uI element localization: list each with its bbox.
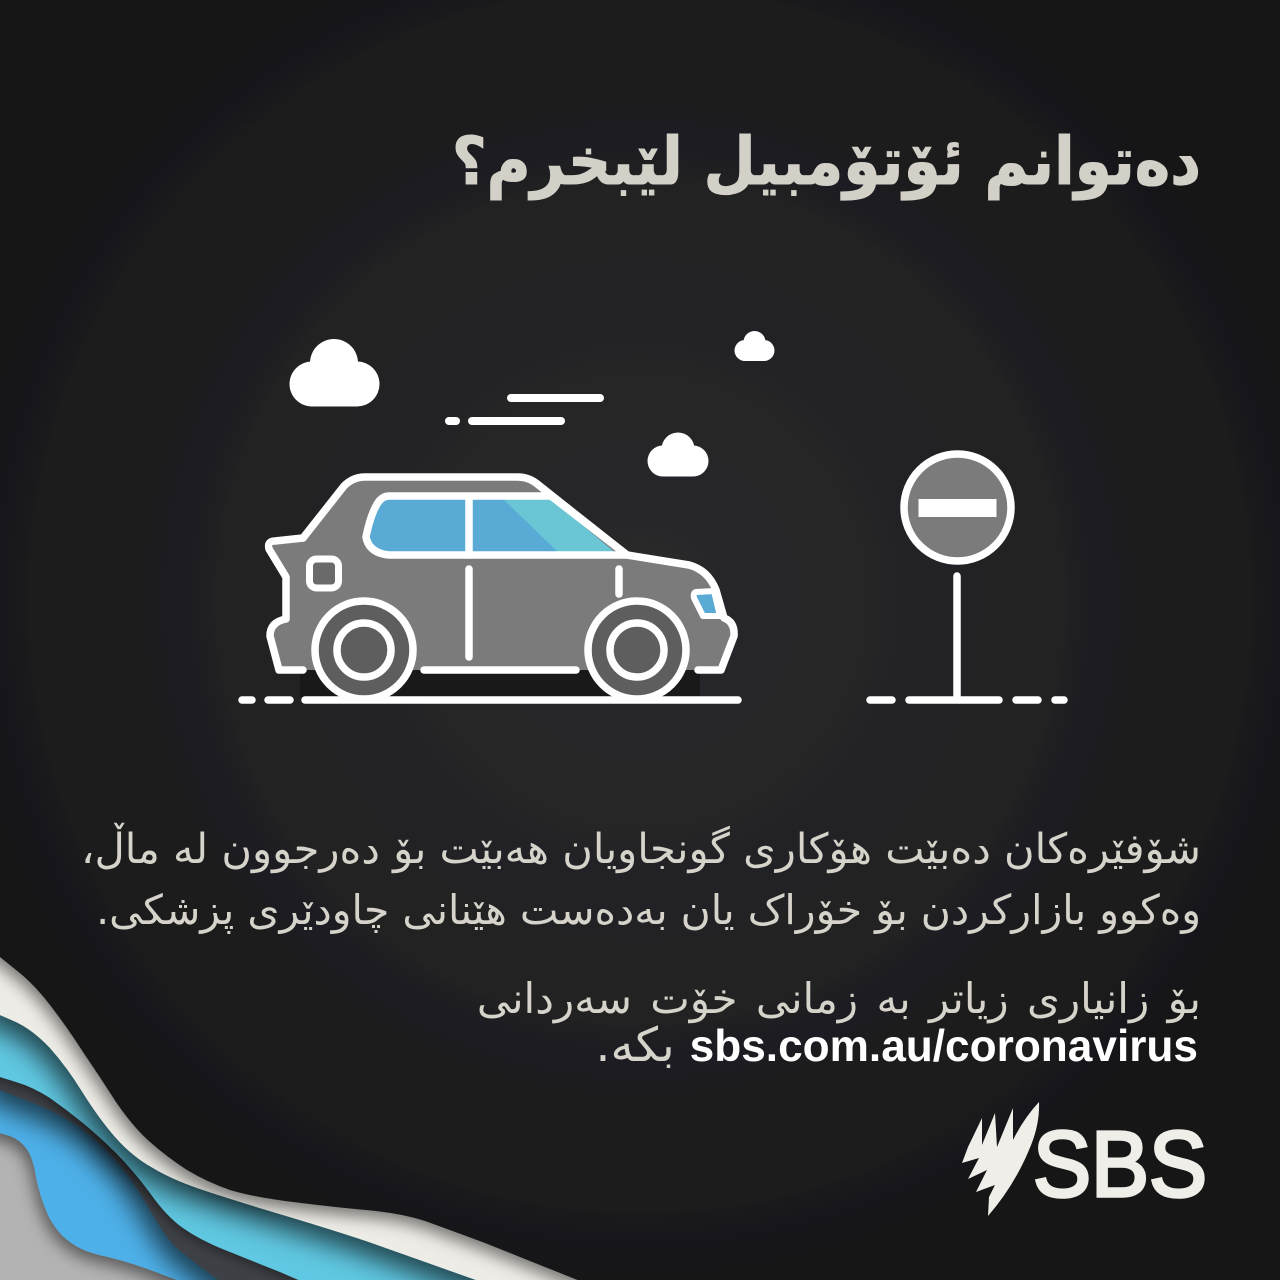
body text: line 2: وەکوو بازارکردن بۆ خۆراک یان بەدەست هێنانی چاودێری پزشکی. xyxy=(96,886,1201,934)
icon: SBS mercury fan xyxy=(962,1102,1039,1216)
car windows xyxy=(370,499,615,553)
website call to action: sbs.com.au/coronavirus بکە. xyxy=(596,1018,1198,1073)
body text: line 1: شۆفێرەکان دەبێت هۆکاری گونجاویان هەبێت بۆ دەرجوون لە ماڵ، xyxy=(81,824,1201,873)
headlight xyxy=(694,591,720,616)
rear wheel xyxy=(315,601,413,699)
icon: medium cloud xyxy=(648,432,708,476)
wordmark: SBS xyxy=(1033,1112,1207,1216)
title: دەتوانم ئۆتۆمبیل لێبخرم؟ xyxy=(452,124,1201,200)
icon: small cloud right xyxy=(734,331,774,361)
car xyxy=(269,477,734,699)
body text: line 3: بۆ زانیاری زیاتر بە زمانی خۆت سەردانی xyxy=(477,974,1201,1023)
car door lines xyxy=(469,497,619,657)
car body xyxy=(270,477,734,670)
ground shadow under car xyxy=(300,670,700,697)
no-entry sign xyxy=(904,454,1011,697)
front wheel xyxy=(588,601,686,699)
fuel cap xyxy=(310,559,338,588)
road under car xyxy=(242,696,738,704)
car roof and body outline xyxy=(269,477,734,670)
speed lines xyxy=(449,398,600,421)
road under sign xyxy=(870,696,1064,704)
icon: large cloud xyxy=(290,339,380,406)
